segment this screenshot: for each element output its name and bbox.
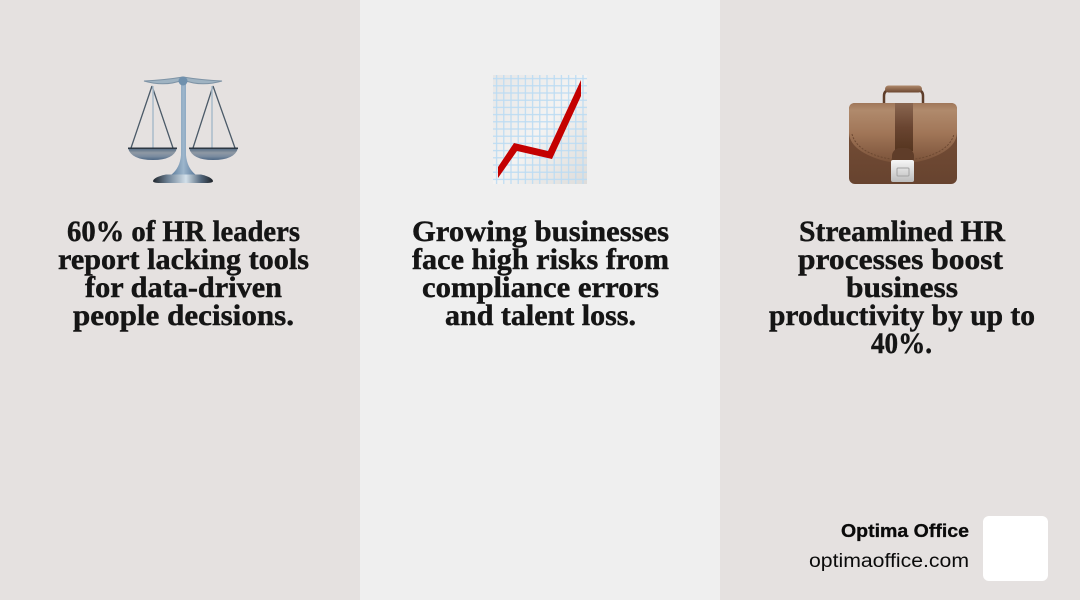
panel: business risks <box>360 0 720 600</box>
heading: growing businesses: Growing businesses <box>412 215 669 248</box>
brand name: Optima Office <box>841 521 969 541</box>
heading: streamlined HR: productivity by up to <box>769 299 1035 332</box>
heading: streamlined HR: Streamlined HR <box>799 215 1005 248</box>
heading: 60% of HR leaders <box>58 215 309 332</box>
brand footer <box>809 516 1048 581</box>
heading: 60% of HR leaders: people decisions. <box>73 299 294 332</box>
heading: 60% of HR leaders: report lacking tools <box>58 243 309 276</box>
icon: rising chart <box>493 75 587 184</box>
brand website: optimaoffice.com <box>809 551 969 572</box>
heading: 60% of HR leaders: 60% of HR leaders <box>67 215 300 248</box>
icon: briefcase <box>849 86 957 184</box>
logo placeholder <box>983 516 1048 581</box>
heading: streamlined HR: business <box>846 271 958 304</box>
heading: growing businesses: and talent loss. <box>445 299 636 332</box>
heading: streamlined HR: processes boost <box>798 243 1003 276</box>
heading: growing businesses: compliance errors <box>422 271 659 304</box>
heading: growing businesses <box>412 215 669 332</box>
heading: growing businesses: face high risks from <box>412 243 669 276</box>
icon: balance scales <box>128 76 238 183</box>
panel: productivity <box>720 0 1080 600</box>
heading: streamlined HR: 40%. <box>871 327 932 360</box>
heading: streamlined HR <box>769 215 1035 360</box>
panel: compliance tools <box>0 0 360 600</box>
heading: 60% of HR leaders: for data-driven <box>85 271 282 304</box>
